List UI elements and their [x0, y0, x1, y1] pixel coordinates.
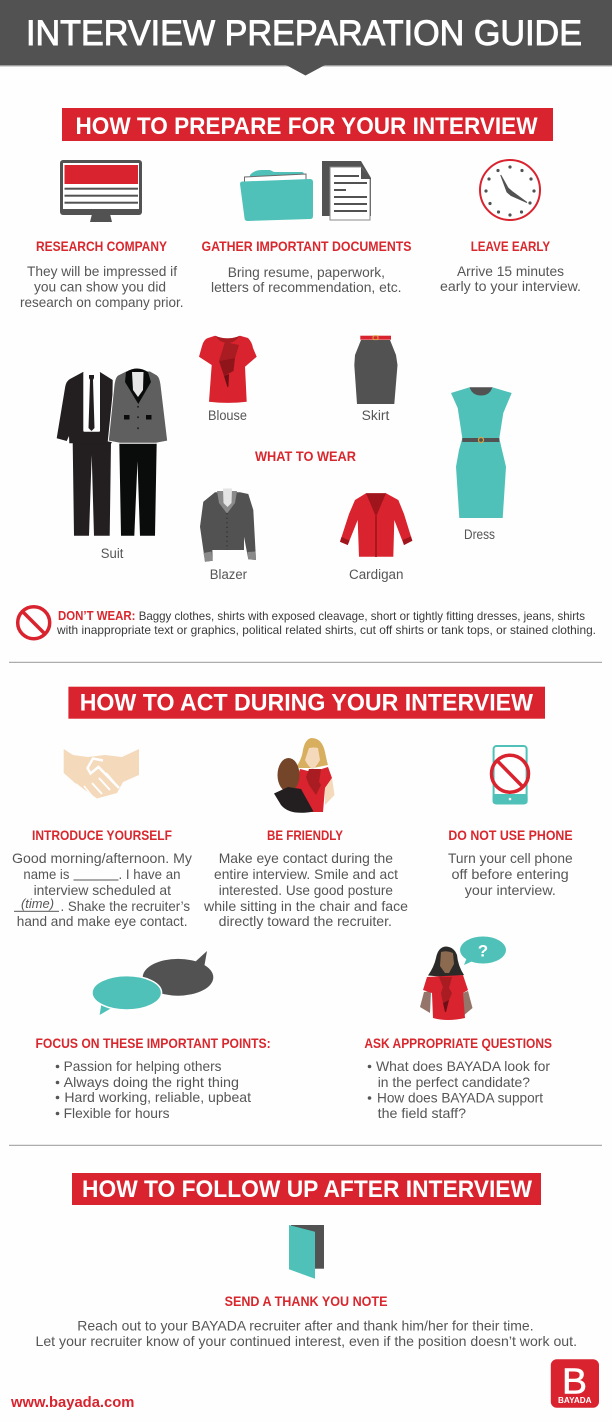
text: introduce yourself: [12, 850, 192, 929]
text: leave early: early to your interview.: [440, 278, 581, 294]
text: be friendly: entire interview. Smile and act: [214, 866, 398, 882]
icon: phone with prohibited sign: [492, 746, 528, 804]
text: be friendly: directly toward the recruiter.: [219, 913, 392, 929]
list: important points: Always doing the right thing: [64, 1074, 239, 1090]
icon: dress: [451, 387, 512, 518]
icon: friendly conversation: [274, 738, 334, 813]
heading: important points: FOCUS ON THESE IMPORTANT POINTS:: [36, 1035, 271, 1051]
panel: how to act: [12, 687, 573, 1121]
text: research company: [20, 263, 184, 310]
text: do not use phone: Turn your cell phone: [448, 850, 573, 866]
label: dress: Dress: [464, 527, 495, 542]
title: INTERVIEW PREPARATION GUIDE: [26, 13, 582, 53]
icon: clock: [480, 160, 540, 220]
icon: prohibited sign: [18, 607, 50, 639]
text: be friendly: interested. Use good posture: [219, 882, 393, 898]
heading: send a thank you note: SEND A THANK YOU NOTE: [225, 1293, 388, 1309]
heading: research company: RESEARCH COMPANY: [36, 238, 168, 254]
list: important points: Hard working, reliable, upbeat: [64, 1089, 251, 1105]
heading: leave early: LEAVE EARLY: [471, 238, 551, 254]
text: leave early: [440, 263, 581, 294]
list: appropriate questions: the field staff?: [378, 1105, 466, 1121]
text: do not use phone: your interview.: [465, 882, 556, 898]
icon: thank you card: [289, 1225, 324, 1279]
panel: what to wear: [18, 336, 596, 639]
list: appropriate questions: in the perfect candidate?: [378, 1074, 530, 1090]
website link: www.bayada.com: [10, 1394, 134, 1411]
label: blazer: Blazer: [210, 567, 247, 582]
section heading: act: HOW TO ACT DURING YOUR INTERVIEW: [80, 689, 533, 716]
label: cardigan: Cardigan: [349, 567, 404, 582]
heading: appropriate questions: ASK APPROPRIATE QUESTIONS: [364, 1035, 552, 1051]
logo: BAYADA: B: [562, 1360, 587, 1401]
heading: introduce yourself: INTRODUCE YOURSELF: [32, 827, 172, 843]
text: thank you note: Let your recruiter know of your continued interest, even if the position doesn’t work out.: [36, 1333, 577, 1349]
icon: blouse: [199, 336, 257, 403]
icon: suit: [57, 368, 168, 536]
text: introduce yourself: name is: [23, 866, 69, 882]
label: suit: Suit: [101, 546, 124, 561]
icon: computer monitor: [60, 160, 142, 222]
callout: don't wear: with inappropriate text or graphics, political related shirts, cut off shirts or tank tops, or stained clothing.: [56, 623, 596, 637]
text: research company: research on company prior.: [20, 294, 184, 310]
icon: skirt: [354, 336, 398, 404]
icon: blazer: [200, 488, 256, 562]
text: thank you note: Reach out to your BAYADA recruiter after and thank him/her for their time.: [77, 1318, 534, 1334]
label: blouse: Blouse: [208, 408, 247, 423]
callout: don't wear: [18, 607, 596, 639]
callout: don't wear: DON’T WEAR:: [58, 608, 136, 623]
text: introduce yourself: . I have an: [118, 866, 180, 882]
label: skirt: Skirt: [362, 408, 390, 423]
icon: folder and documents: [240, 161, 371, 221]
logo: BAYADA: BAYADA: [558, 1395, 592, 1405]
text: do not use phone: off before entering: [452, 866, 569, 882]
header banner: [0, 0, 612, 76]
panel: how to follow up: [36, 1173, 577, 1349]
text: introduce yourself: (time): [21, 896, 54, 911]
icon: speech bubbles: [92, 951, 213, 1015]
text: introduce yourself: interview scheduled at: [34, 882, 171, 898]
icon: woman asking question: [420, 936, 506, 1020]
text: introduce yourself: . Shake the recruiter’s: [60, 898, 190, 914]
text: introduce yourself: hand and make eye contact.: [17, 913, 187, 929]
list: important points: Flexible for hours: [64, 1105, 170, 1121]
heading: gather documents: GATHER IMPORTANT DOCUMENTS: [202, 238, 412, 254]
heading: do not use phone: DO NOT USE PHONE: [448, 827, 573, 843]
text: gather documents: [211, 264, 402, 295]
text: gather documents: Bring resume, paperwork,: [228, 264, 385, 280]
list: important points: [56, 1058, 251, 1121]
list: appropriate questions: How does BAYADA support: [377, 1090, 543, 1106]
list: appropriate questions: What does BAYADA look for: [376, 1058, 550, 1074]
heading: be friendly: BE FRIENDLY: [267, 827, 344, 843]
panel: how to prepare: [20, 108, 581, 310]
text: research company: They will be impressed if: [27, 263, 177, 279]
callout: don't wear: Baggy clothes, shirts with exposed cleavage, short or tightly fitting dresses, jeans, shirts: [139, 609, 585, 623]
list: appropriate questions: [368, 1058, 550, 1121]
text: leave early: Arrive 15 minutes: [457, 263, 564, 279]
text: research company: you can show you did: [34, 278, 166, 294]
text: introduce yourself: Good morning/afternoon. My: [12, 850, 192, 866]
list: important points: Passion for helping others: [64, 1058, 221, 1074]
text: be friendly: while sitting in the chair and face: [203, 898, 408, 914]
text: be friendly: Make eye contact during the: [219, 850, 393, 866]
icon: cardigan: [340, 493, 412, 557]
text: thank you note: [36, 1318, 577, 1349]
icon: question bubble: ?: [478, 942, 488, 960]
logo: BAYADA: [551, 1359, 599, 1408]
text: gather documents: letters of recommendation, etc.: [211, 279, 402, 295]
section heading: prepare: HOW TO PREPARE FOR YOUR INTERVIEW: [76, 113, 538, 140]
section heading: follow up: HOW TO FOLLOW UP AFTER INTERVIEW: [82, 1176, 532, 1203]
heading: what to wear: WHAT TO WEAR: [255, 448, 356, 464]
text: be friendly: [203, 850, 408, 929]
icon: handshake: [64, 749, 139, 798]
text: do not use phone: [448, 850, 573, 898]
